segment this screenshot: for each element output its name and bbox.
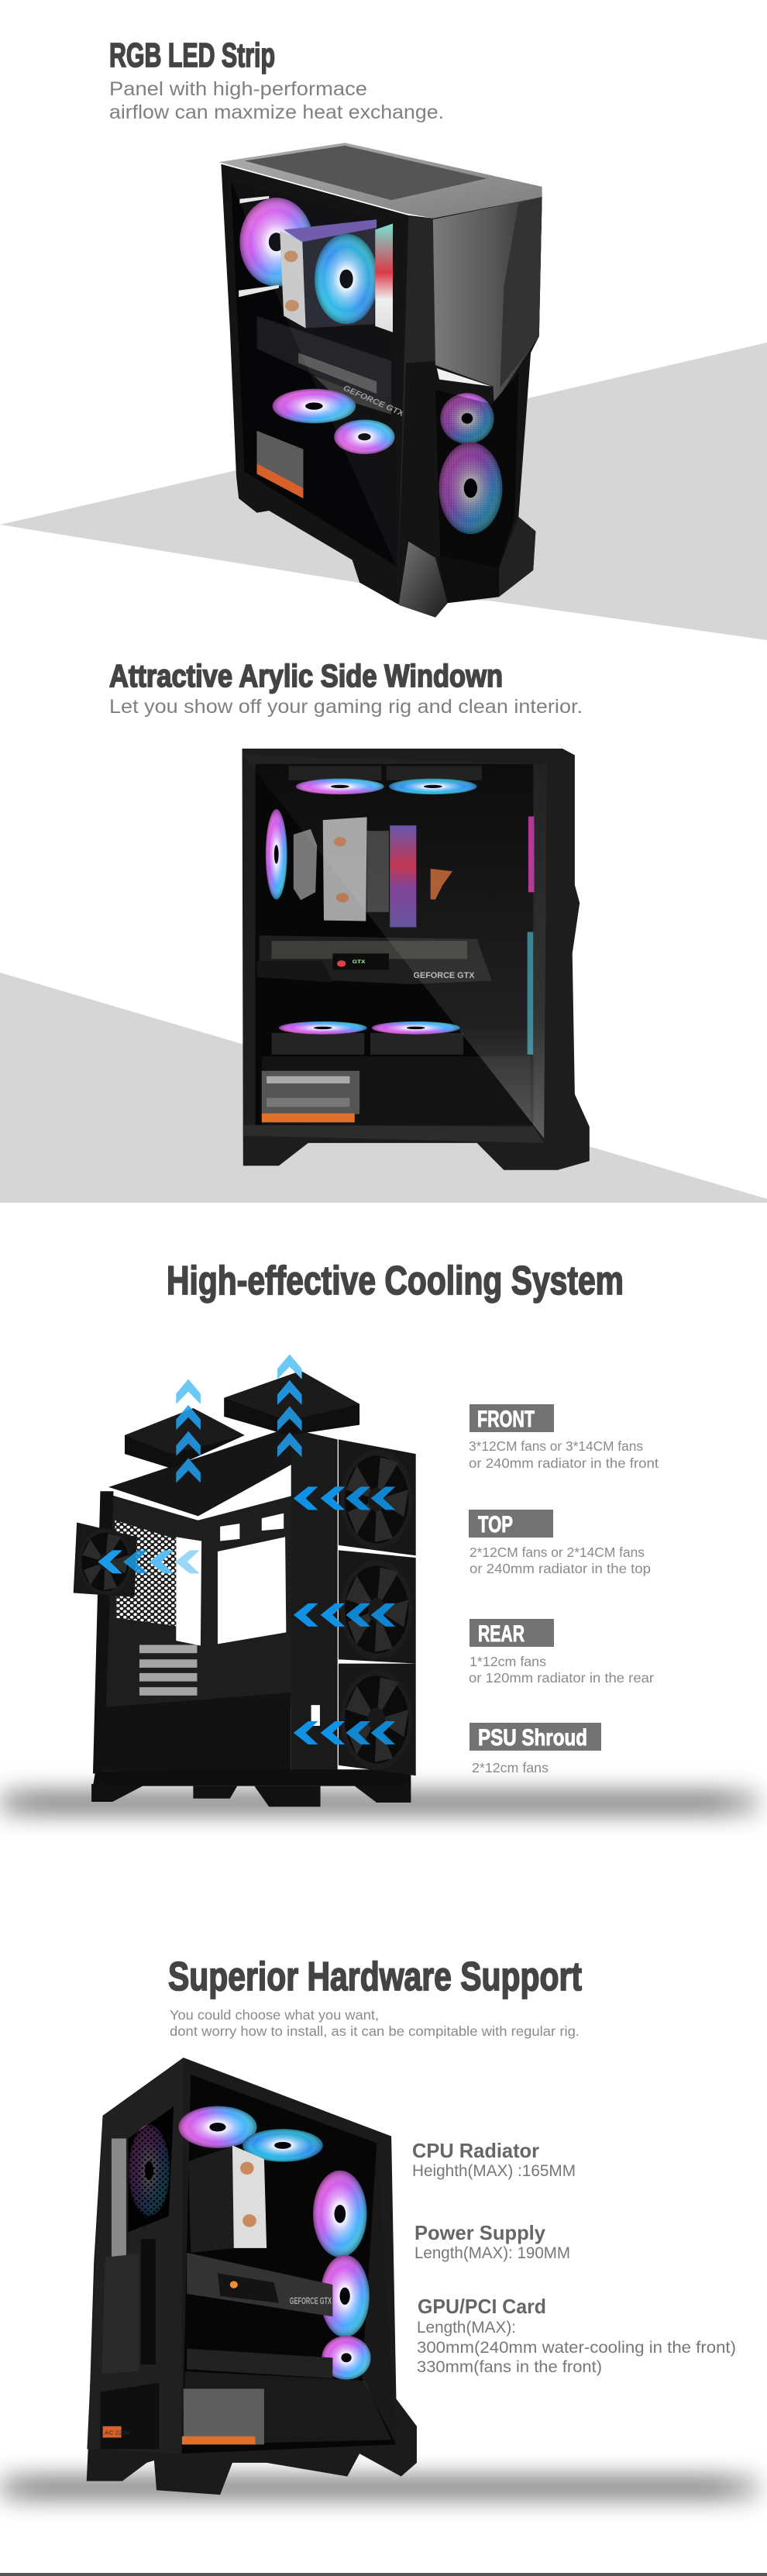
top fans xyxy=(289,766,495,797)
section: hardware support xyxy=(0,1954,759,2501)
heading: High-effective Cooling System xyxy=(167,1259,624,1303)
section: cooling system xyxy=(0,1259,759,1816)
PC case illustration, side view xyxy=(242,749,590,1170)
bottom fans xyxy=(271,1021,463,1055)
spec: front: FRONT xyxy=(477,1407,535,1432)
LED strips xyxy=(239,196,279,297)
power supply label xyxy=(256,431,303,498)
RAM sticks xyxy=(390,825,416,927)
interior xyxy=(256,764,533,1125)
spec: power supply: Length(MAX): 190MM xyxy=(414,2244,570,2262)
front fans xyxy=(339,1439,416,1775)
front upper panel xyxy=(397,197,542,603)
heading: Superior Hardware Support xyxy=(168,1954,582,1999)
spec: CPU radiator xyxy=(412,2139,576,2180)
CPU cooler xyxy=(323,817,389,921)
top panel xyxy=(218,143,542,219)
bottom bar xyxy=(243,1125,544,1143)
spec: CPU radiator: CPU Radiator xyxy=(412,2139,539,2162)
graphics card xyxy=(256,316,406,418)
wiring xyxy=(431,869,452,900)
airflow arrows, front bottom xyxy=(294,1721,395,1744)
graphics card xyxy=(256,935,492,984)
spec: GPU/PCI card: GPU/PCI Card xyxy=(418,2295,546,2318)
section: RGB LED strip xyxy=(0,36,767,640)
shroud and power supply label xyxy=(182,2371,391,2444)
spec: PSU shroud: PSU Shroud xyxy=(478,1725,587,1751)
bottom bar xyxy=(0,2573,767,2576)
graphics card: GEFORCE GTX xyxy=(341,384,406,418)
airflow arrows, front top xyxy=(294,1486,395,1510)
spec: top xyxy=(469,1510,651,1576)
background wedge xyxy=(0,343,767,640)
glass panel xyxy=(243,755,547,1138)
airflow arrows, front middle xyxy=(294,1603,395,1627)
glass edge xyxy=(362,2143,396,2444)
cooling diagram xyxy=(74,1354,416,1806)
airflow arrows, rear xyxy=(98,1550,200,1573)
floor shadow xyxy=(0,2474,759,2501)
spec: front xyxy=(469,1404,659,1471)
spec: power supply xyxy=(414,2221,570,2262)
graphics card: GEFORCE GTX xyxy=(414,970,475,980)
CPU cooler xyxy=(280,219,378,328)
rear panel: AC 220V xyxy=(105,2430,131,2436)
airflow arrows up, left stack xyxy=(176,1379,201,1483)
description: airflow can maxmize heat exchange. xyxy=(109,102,444,123)
spec: rear xyxy=(469,1619,654,1686)
description: dont worry how to install, as it can be compitable with regular rig. xyxy=(170,2023,580,2039)
spec: rear: 1*12cm fans xyxy=(469,1654,546,1669)
power supply shroud with label xyxy=(262,1056,531,1125)
spec: front: 3*12CM fans or 3*14CM fans xyxy=(469,1438,643,1454)
spec: rear: REAR xyxy=(478,1621,525,1647)
heading: Attractive Arylic Side Windown xyxy=(109,658,503,694)
graphics card: GTX xyxy=(353,959,366,965)
bottom fan housings xyxy=(187,2349,332,2378)
lower front facets xyxy=(399,517,535,618)
spec: PSU shroud xyxy=(469,1723,601,1775)
top fans xyxy=(125,1371,359,1469)
spec: top: 2*12CM fans or 2*14CM fans xyxy=(469,1545,645,1560)
PC case illustration, rear view xyxy=(87,2058,417,2495)
chassis xyxy=(91,1427,411,1806)
bottom fans xyxy=(273,389,395,454)
description: Let you show off your gaming rig and clean interior. xyxy=(109,696,583,718)
front fans xyxy=(313,2171,371,2380)
graphics card: GEFORCE GTX xyxy=(290,2295,332,2306)
spec: GPU/PCI card: Length(MAX): xyxy=(417,2319,516,2337)
RAM sticks xyxy=(375,223,393,332)
airflow arrows up, right stack xyxy=(277,1354,302,1457)
rear fan xyxy=(266,809,287,900)
spec: GPU/PCI card xyxy=(417,2295,736,2376)
window interior xyxy=(182,2075,396,2454)
front mesh with fans xyxy=(435,374,518,568)
CPU cooler xyxy=(188,2145,267,2253)
rear panel xyxy=(87,2058,184,2454)
spec: top: TOP xyxy=(478,1512,513,1538)
spec: GPU/PCI card: 330mm(fans in the front) xyxy=(417,2358,602,2376)
description: Panel with high-performace xyxy=(109,78,367,100)
side window interior xyxy=(231,181,396,566)
floor shadow xyxy=(0,1789,759,1816)
rear fan xyxy=(239,198,313,286)
section: acrylic side window xyxy=(0,658,767,1203)
motherboard heatsink xyxy=(294,829,317,901)
spec: top: or 240mm radiator in the top xyxy=(469,1561,651,1576)
spec: front: or 240mm radiator in the front xyxy=(469,1455,659,1471)
spec: PSU shroud: 2*12cm fans xyxy=(472,1760,549,1775)
spec: GPU/PCI card: 300mm(240mm water-cooling in the front) xyxy=(417,2339,736,2357)
top fans xyxy=(164,2099,334,2167)
heading: RGB LED Strip xyxy=(109,36,275,74)
front fan glow xyxy=(528,816,534,1055)
spec: rear: or 120mm radiator in the rear xyxy=(469,1670,654,1686)
rear fan xyxy=(74,1522,137,1597)
spec: CPU radiator: Heighth(MAX) :165MM xyxy=(412,2162,576,2180)
background wedge xyxy=(0,973,767,1203)
glass reflection xyxy=(231,181,396,566)
PC case illustration, three-quarter view xyxy=(218,143,542,618)
spec: power supply: Power Supply xyxy=(414,2221,546,2244)
graphics card xyxy=(187,2253,332,2316)
description: You could choose what you want, xyxy=(170,2007,379,2023)
